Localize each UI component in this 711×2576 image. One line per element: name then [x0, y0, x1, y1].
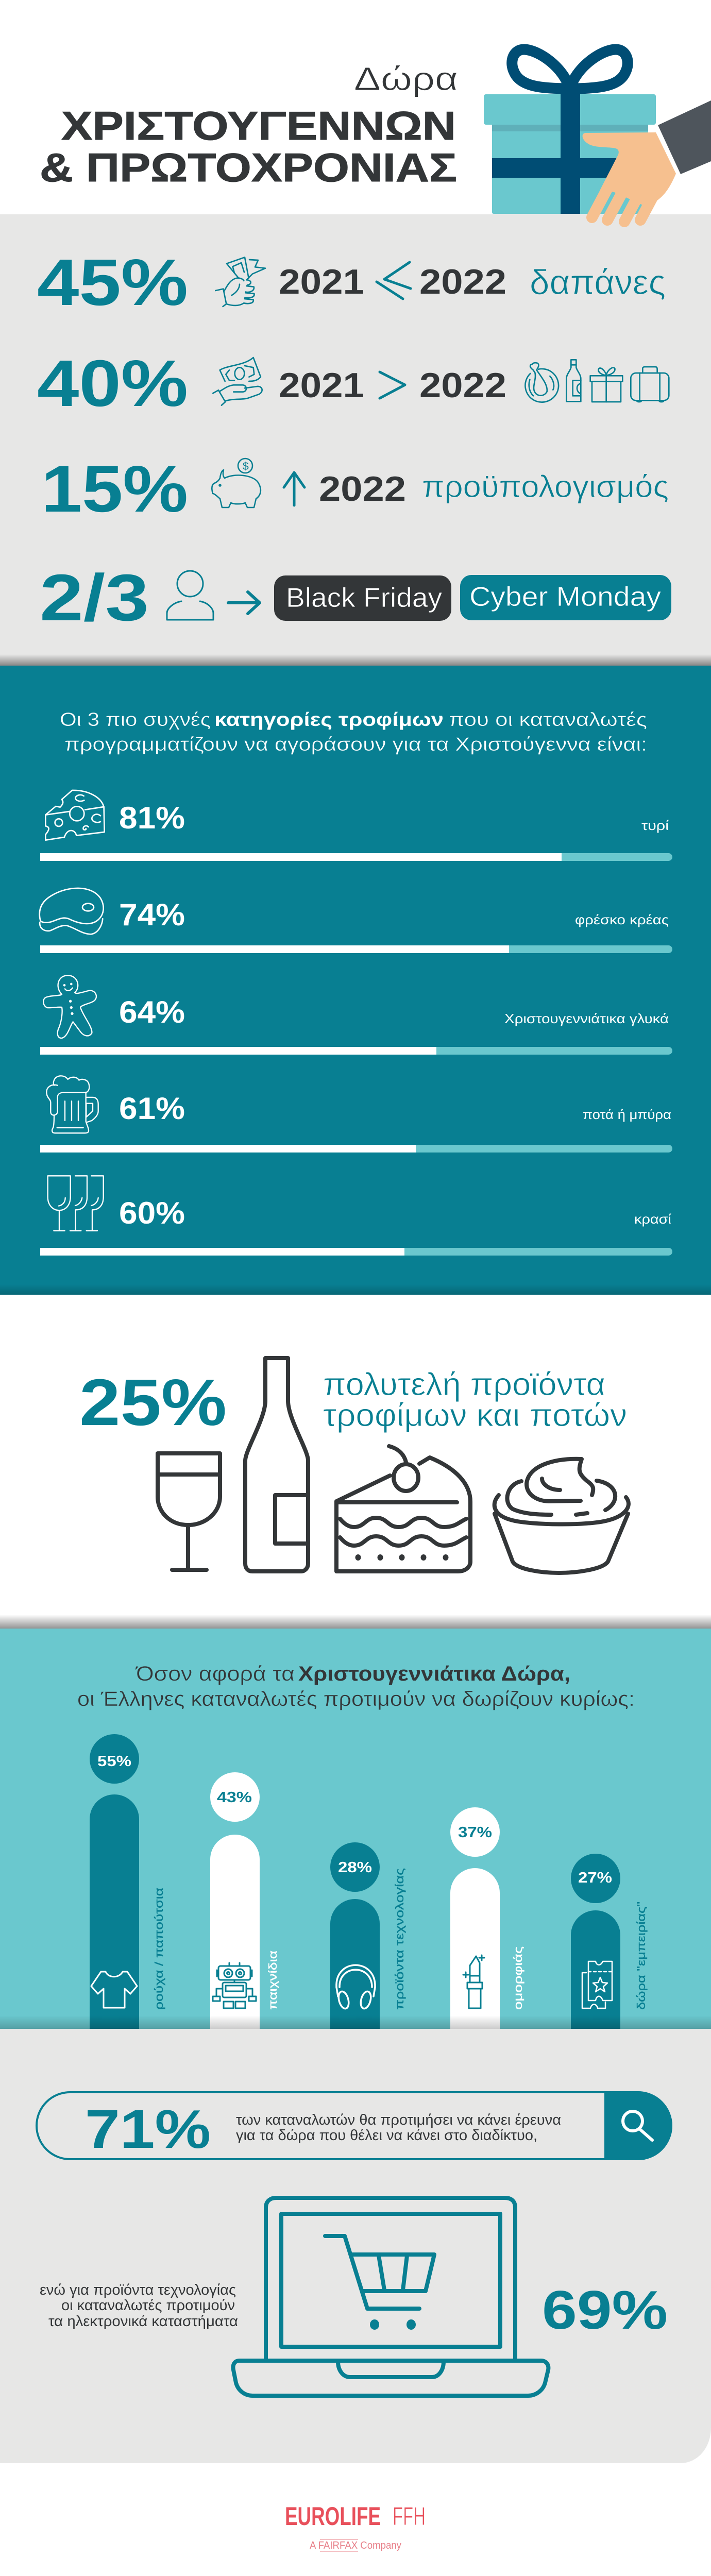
icon: laptop with cart: [233, 2198, 548, 2396]
icon: bottle: [245, 1358, 308, 1571]
button: Black Friday: [274, 575, 451, 621]
row: cheese 81%: τυρί: [641, 818, 669, 833]
text: electronics stores: οι καταναλωτές προτιμούν: [61, 2297, 235, 2314]
bar: clothes and shoes 55%: [90, 1734, 165, 2029]
stat: 40% spending: [37, 347, 669, 420]
bar: 60%: [40, 1248, 672, 1256]
icon: steak: [40, 888, 104, 934]
heading: food categories: κατηγορίες τροφίμων: [214, 709, 444, 730]
row: fresh meat 74%: 74%: [119, 897, 185, 932]
panel: spending statistics: [0, 49, 711, 666]
icon: cheese: [45, 790, 105, 840]
row: fresh meat 74%: φρέσκο κρέας: [575, 912, 669, 927]
search bar: των καταναλωτών θα προτιμήσει να κάνει έρευνα: [236, 2112, 561, 2128]
row: Christmas sweets 64%: [40, 975, 672, 1055]
panel: header: [0, 0, 711, 214]
button: Cyber Monday: [460, 575, 671, 620]
stat: 45% spending: 2022: [419, 262, 506, 301]
icon: ticket: [582, 1961, 612, 2008]
icon: person: [167, 571, 213, 620]
row: fresh meat 74%: [40, 888, 672, 953]
heading: food categories: προγραμματίζουν να αγοράσουν για τα Χριστούγεννα είναι:: [64, 734, 647, 755]
icon: cupcake: [495, 1459, 629, 1573]
logo: Eurolife FFH: EUROLIFE: [285, 2502, 381, 2531]
bar: 74%: [40, 945, 672, 953]
heading: food categories: [60, 709, 647, 755]
heading: gifts: [77, 1663, 635, 1710]
text: luxury products: [323, 1367, 627, 1433]
button: Cyber Monday: Cyber Monday: [469, 582, 662, 612]
stat: 40% spending: 2021: [279, 366, 364, 405]
icon: headphones: [336, 1965, 375, 2010]
icon: lipstick: [463, 1955, 484, 2008]
button: Black Friday: Black Friday: [286, 583, 443, 613]
bar: technology products 28%: 28%: [338, 1859, 372, 1876]
row: wine 60%: [40, 1176, 672, 1256]
icon: magnifier: [623, 2111, 652, 2140]
icons: food, drink, gift, travel: [525, 360, 669, 402]
logo: Eurolife FFH: FFH: [393, 2502, 426, 2531]
row: cheese 81%: 81%: [119, 801, 185, 835]
title: subtitle: Δώρα: [354, 60, 458, 97]
bar: beauty 37%: [450, 1807, 524, 2029]
bar: 64%: [40, 1047, 672, 1055]
logo: Eurolife FFH: A FAIRFAX Company: [310, 2540, 401, 2551]
stat: 45% spending: 45%: [37, 246, 188, 319]
row: wine 60%: 60%: [119, 1196, 185, 1230]
bar: experience gifts 27%: 27%: [578, 1870, 612, 1886]
bar: 81%: [40, 853, 672, 861]
icon: piggy bank with coin: [212, 459, 261, 507]
text: electronics stores: ενώ για προϊόντα τεχνολογίας: [40, 2282, 236, 2298]
icon: gingerbread man: [43, 975, 96, 1038]
panel: Christmas gifts: [0, 1629, 711, 2029]
row: drinks or beer 61%: [40, 1076, 672, 1153]
stat: 15% budget: 2022: [319, 469, 406, 509]
heading: gifts: Χριστουγεννιάτικα Δώρα,: [298, 1663, 570, 1685]
row: Christmas sweets 64%: 64%: [119, 995, 185, 1029]
heading: gifts: Όσον αφορά τα: [135, 1663, 295, 1685]
logo: Eurolife FFH: [285, 2502, 426, 2551]
stat: 40% spending: 40%: [37, 347, 188, 420]
icon: gift held by hand: [484, 49, 711, 222]
bar: experience gifts 27%: δώρα "εμπειρίας": [635, 1902, 648, 2010]
search bar: για τα δώρα που θέλει να κάνει στο διαδίκτυο,: [236, 2127, 537, 2144]
bar: clothes and shoes 55%: 55%: [97, 1753, 131, 1770]
icon: right arrow: [228, 592, 260, 614]
icon: fist with banknotes: [215, 257, 265, 307]
stat: 15% budget: [41, 452, 669, 526]
bar: clothes and shoes 55%: ρούχα / παπούτσια: [153, 1888, 165, 2010]
icon: up arrow: [284, 472, 304, 505]
heading: gifts: οι Έλληνες καταναλωτές προτιμούν να δωρίζουν κυρίως:: [77, 1688, 635, 1710]
row: Christmas sweets 64%: Χριστουγεννιάτικα γλυκά: [504, 1011, 669, 1026]
bar: 61%: [40, 1145, 672, 1153]
search bar: [37, 2091, 672, 2160]
stat: 15% budget: 15%: [41, 452, 188, 526]
icon: robot: [213, 1963, 256, 2008]
bar: beauty 37%: ομορφιάς: [512, 1946, 524, 2010]
stat: 15% budget: προϋπολογισμός: [422, 469, 669, 504]
text: electronics stores: τα ηλεκτρονικά καταστήματα: [48, 2313, 238, 2330]
icon: piggy bank with coin: $: [243, 461, 249, 472]
panel: online research: 69%: [542, 2280, 668, 2341]
stat: two thirds shoppers: [40, 561, 671, 635]
panel: luxury food and drink: 25%: [79, 1366, 227, 1439]
panel: luxury food and drink: [0, 1295, 711, 1629]
heading: food categories: Οι 3 πιο συχνές: [60, 709, 211, 730]
row: drinks or beer 61%: 61%: [119, 1091, 185, 1126]
icon: cherry: [394, 1464, 418, 1491]
text: luxury products: πολυτελή προϊόντα: [323, 1367, 605, 1402]
bar: toys 43%: παιχνίδια: [266, 1951, 279, 2010]
panel: food categories: [0, 666, 711, 1295]
bar: toys 43%: [210, 1772, 279, 2029]
title: line 2: & ΠΡΩΤΟΧΡΟΝΙΑΣ: [40, 145, 457, 190]
bar: toys 43%: 43%: [217, 1789, 252, 1806]
bar: beauty 37%: 37%: [458, 1824, 492, 1841]
icon: cake dots: [356, 1554, 448, 1561]
stat: 45% spending: [37, 246, 666, 319]
icon: beer mug: [46, 1076, 98, 1133]
icon: wine glasses: [48, 1176, 104, 1231]
icon: shopping cart: [325, 2236, 434, 2328]
panel: online research: [0, 2029, 711, 2463]
bar: experience gifts 27%: [571, 1854, 648, 2029]
icon: less-than sign: [377, 262, 411, 299]
stat: 45% spending: δαπάνες: [530, 263, 666, 302]
row: drinks or beer 61%: ποτά ή μπύρα: [583, 1107, 671, 1122]
stat: two thirds shoppers: 2/3: [40, 561, 149, 635]
row: wine 60%: κρασί: [634, 1211, 671, 1227]
text: electronics stores: [40, 2282, 238, 2330]
heading: food categories: που οι καταναλωτές: [449, 709, 647, 730]
title: line 1: ΧΡΙΣΤΟΥΓΕΝΝΩΝ: [61, 103, 456, 148]
icon: hand with banknote: [213, 358, 262, 405]
stat: 40% spending: 2022: [419, 366, 506, 405]
icon: cake slice: [336, 1446, 470, 1571]
text: luxury products: τροφίμων και ποτών: [323, 1398, 627, 1433]
search bar: 71%: [85, 2099, 211, 2160]
icon: t-shirt: [91, 1972, 137, 2008]
icon: greater-than sign: [380, 372, 405, 398]
bar: technology products 28%: προϊόντα τεχνολογίας: [393, 1868, 406, 2010]
icon: wine glass: [158, 1453, 220, 1570]
bar: technology products 28%: [330, 1842, 406, 2029]
stat: 45% spending: 2021: [279, 262, 364, 301]
row: cheese 81%: [40, 790, 672, 861]
